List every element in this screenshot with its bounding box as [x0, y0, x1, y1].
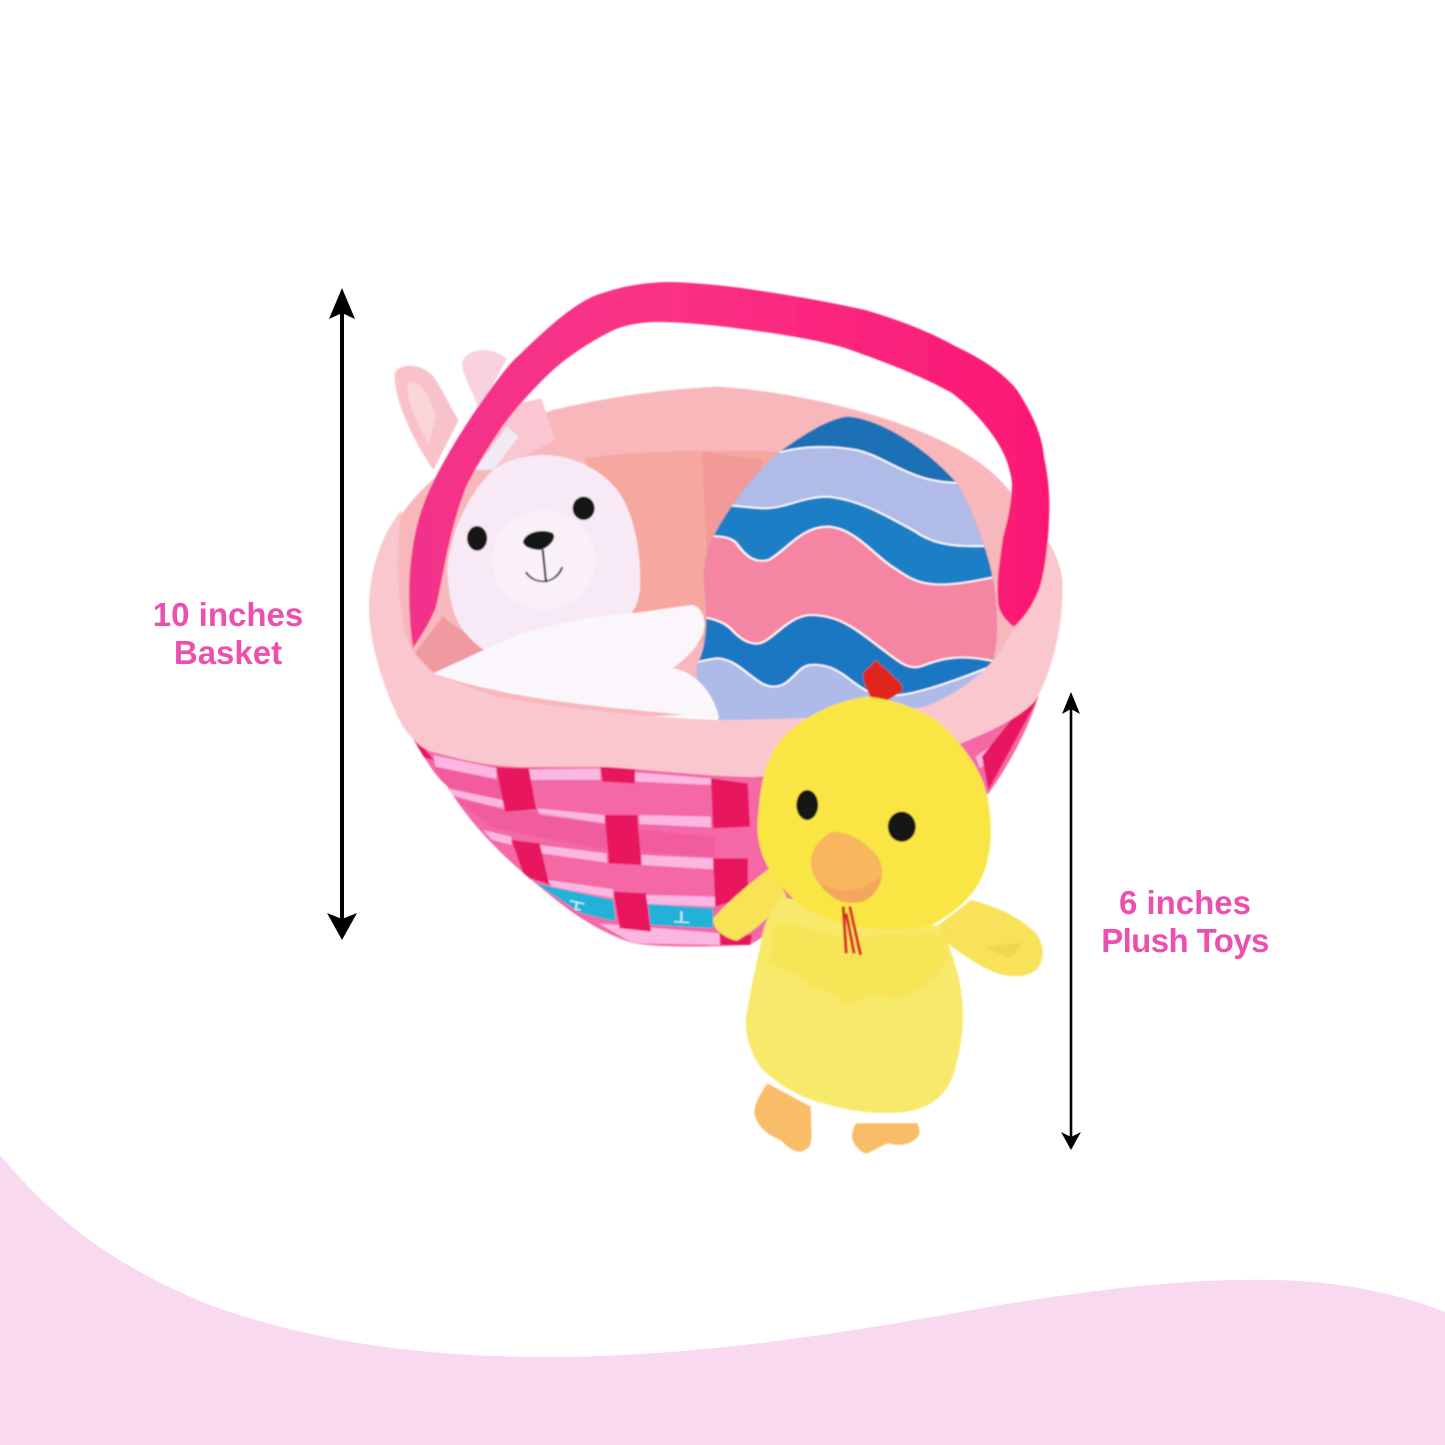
weave light stripes [433, 733, 1010, 945]
basket rim front [369, 503, 1063, 777]
crossing straps [403, 697, 1038, 945]
label: basket size: Basket [174, 634, 282, 671]
chick belly shade [767, 920, 949, 1007]
basket inner wall [415, 451, 778, 675]
bunny back ears [394, 350, 507, 470]
chick plush [713, 697, 1043, 1153]
egg plush [696, 416, 998, 721]
label: plush size: 6 inches [1119, 884, 1251, 921]
bunny ear inner part [470, 398, 555, 470]
label: plush size: Plush Toys [1101, 922, 1269, 959]
chick wings [713, 867, 1043, 976]
bunny nose and smile [523, 531, 562, 582]
chick feet [754, 1083, 919, 1153]
chick comb [863, 660, 902, 707]
blue base band [535, 883, 713, 928]
bunny plush [433, 455, 719, 718]
plush height arrow [1061, 692, 1081, 1150]
basket woven body [413, 696, 1039, 948]
background wave [0, 1155, 1445, 1445]
basket height arrow [327, 288, 357, 940]
chick body [746, 897, 963, 1113]
chick wattle [843, 907, 861, 955]
weave deep bands [433, 767, 715, 857]
chick beak [811, 832, 882, 903]
blue band symbols [570, 901, 689, 923]
bunny eyes [467, 497, 595, 551]
chick head [757, 697, 991, 929]
upper scene: ears, basket interior, egg and bunny [369, 350, 1063, 730]
basket rim back [369, 387, 1063, 727]
basket handle [409, 282, 1049, 648]
illustration: Easter basket with plush toys [369, 282, 1067, 1153]
bunny muzzle [492, 510, 595, 610]
label: basket size: 10 inches [153, 596, 303, 633]
chick eyes [796, 790, 916, 842]
